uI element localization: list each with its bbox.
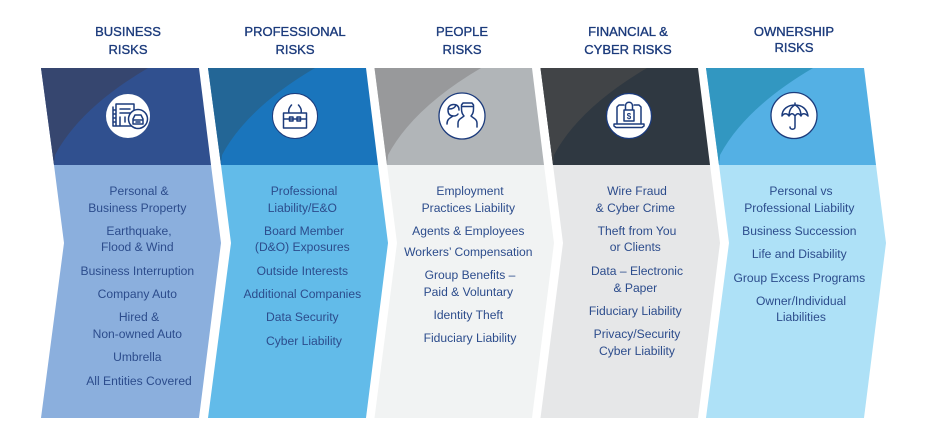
list: business risks: Earthquake, bbox=[106, 224, 172, 238]
panel: professional risks bbox=[208, 24, 388, 418]
list: professional risks: Cyber Liability bbox=[266, 334, 343, 348]
header band: financial bbox=[540, 68, 710, 165]
header shade: professional bbox=[208, 68, 315, 165]
list: professional risks: Board Member bbox=[264, 224, 344, 238]
list: people risks: Workers’ Compensation bbox=[404, 245, 533, 259]
list: financial and cyber risks: & Cyber Crime bbox=[596, 201, 675, 215]
heading: financial and cyber risks: CYBER RISKS bbox=[584, 42, 672, 57]
icon detail: dollar sign: $ bbox=[627, 112, 632, 121]
header shade: financial bbox=[540, 68, 647, 165]
header band: professional bbox=[208, 68, 378, 165]
list: people risks: Group Benefits – bbox=[425, 268, 516, 282]
header band: business bbox=[41, 68, 211, 165]
heading: professional risks: PROFESSIONAL bbox=[244, 24, 346, 39]
list: business risks: Flood & Wind bbox=[101, 240, 174, 254]
header band: people bbox=[374, 68, 544, 165]
header shade: ownership bbox=[706, 68, 813, 165]
list: financial and cyber risks: Cyber Liability bbox=[599, 344, 676, 358]
heading: professional risks: RISKS bbox=[275, 42, 315, 57]
list: ownership risks: Professional Liability bbox=[744, 201, 855, 215]
list: people risks: Identity Theft bbox=[433, 308, 504, 322]
list: business risks: Non-owned Auto bbox=[93, 327, 182, 341]
list: ownership risks: Liabilities bbox=[776, 310, 826, 324]
icon: umbrella bbox=[771, 92, 817, 138]
header shade: people bbox=[374, 68, 481, 165]
list: ownership risks: Owner/Individual bbox=[756, 294, 846, 308]
list: financial and cyber risks: & Paper bbox=[613, 281, 657, 295]
list: people risks: Fiduciary Liability bbox=[424, 331, 517, 345]
panel: financial and cyber risks bbox=[540, 24, 720, 418]
list: ownership risks: Group Excess Programs bbox=[733, 271, 865, 285]
list: business risks: Company Auto bbox=[98, 287, 177, 301]
header band: ownership bbox=[706, 68, 876, 165]
list: financial and cyber risks: Data – Electronic bbox=[591, 264, 683, 278]
list: people risks: Paid & Voluntary bbox=[424, 285, 514, 299]
chevron body: ownership bbox=[706, 165, 886, 418]
header shade: business bbox=[41, 68, 148, 165]
icon: laptop with padlock bbox=[606, 94, 652, 138]
heading: business risks: BUSINESS bbox=[95, 24, 161, 39]
list: ownership risks: Life and Disability bbox=[752, 247, 848, 261]
heading: financial and cyber risks: FINANCIAL & bbox=[588, 24, 668, 39]
icon: two people bbox=[439, 93, 485, 139]
list: professional risks: (D&O) Exposures bbox=[255, 240, 350, 254]
list: ownership risks: Business Succession bbox=[742, 224, 856, 238]
list: business risks: Business Property bbox=[88, 201, 187, 215]
list: business risks: All Entities Covered bbox=[86, 374, 192, 388]
chevron body: people bbox=[374, 165, 554, 418]
list: financial and cyber risks: or Clients bbox=[610, 240, 661, 254]
list: financial and cyber risks: Theft from You bbox=[598, 224, 676, 238]
heading: ownership risks: RISKS bbox=[774, 40, 814, 55]
list: professional risks: Liability/E&O bbox=[268, 201, 337, 215]
heading: ownership risks: OWNERSHIP bbox=[754, 24, 834, 39]
list: professional risks: Professional bbox=[271, 184, 337, 198]
list: business risks: Business Interruption bbox=[81, 264, 194, 278]
list: business risks: Umbrella bbox=[113, 350, 162, 364]
chevron body: professional bbox=[208, 165, 388, 418]
heading: people risks: PEOPLE bbox=[436, 24, 488, 39]
list: professional risks: Outside Interests bbox=[257, 264, 348, 278]
list: people risks: Employment bbox=[436, 184, 504, 198]
icon: building and car bbox=[106, 94, 150, 138]
list: business risks: Hired & bbox=[119, 310, 159, 324]
heading: people risks: RISKS bbox=[442, 42, 482, 57]
panel: people risks bbox=[374, 24, 554, 418]
list: people risks: Agents & Employees bbox=[412, 224, 524, 238]
panel: ownership risks bbox=[706, 24, 886, 418]
panel: business risks bbox=[41, 24, 221, 418]
list: people risks: Practices Liability bbox=[422, 201, 516, 215]
list: professional risks: Additional Companies bbox=[243, 287, 361, 301]
chevron body: financial bbox=[540, 165, 720, 418]
list: financial and cyber risks: Privacy/Security bbox=[594, 327, 681, 341]
list: business risks: Personal & bbox=[109, 184, 169, 198]
list: financial and cyber risks: Fiduciary Liability bbox=[589, 304, 683, 318]
chevron body: business bbox=[41, 165, 221, 418]
list: professional risks: Data Security bbox=[266, 310, 340, 324]
list: ownership risks: Personal vs bbox=[769, 184, 833, 198]
list: financial and cyber risks: Wire Fraud bbox=[607, 184, 667, 198]
heading: business risks: RISKS bbox=[108, 42, 148, 57]
icon: briefcase bbox=[272, 94, 318, 138]
